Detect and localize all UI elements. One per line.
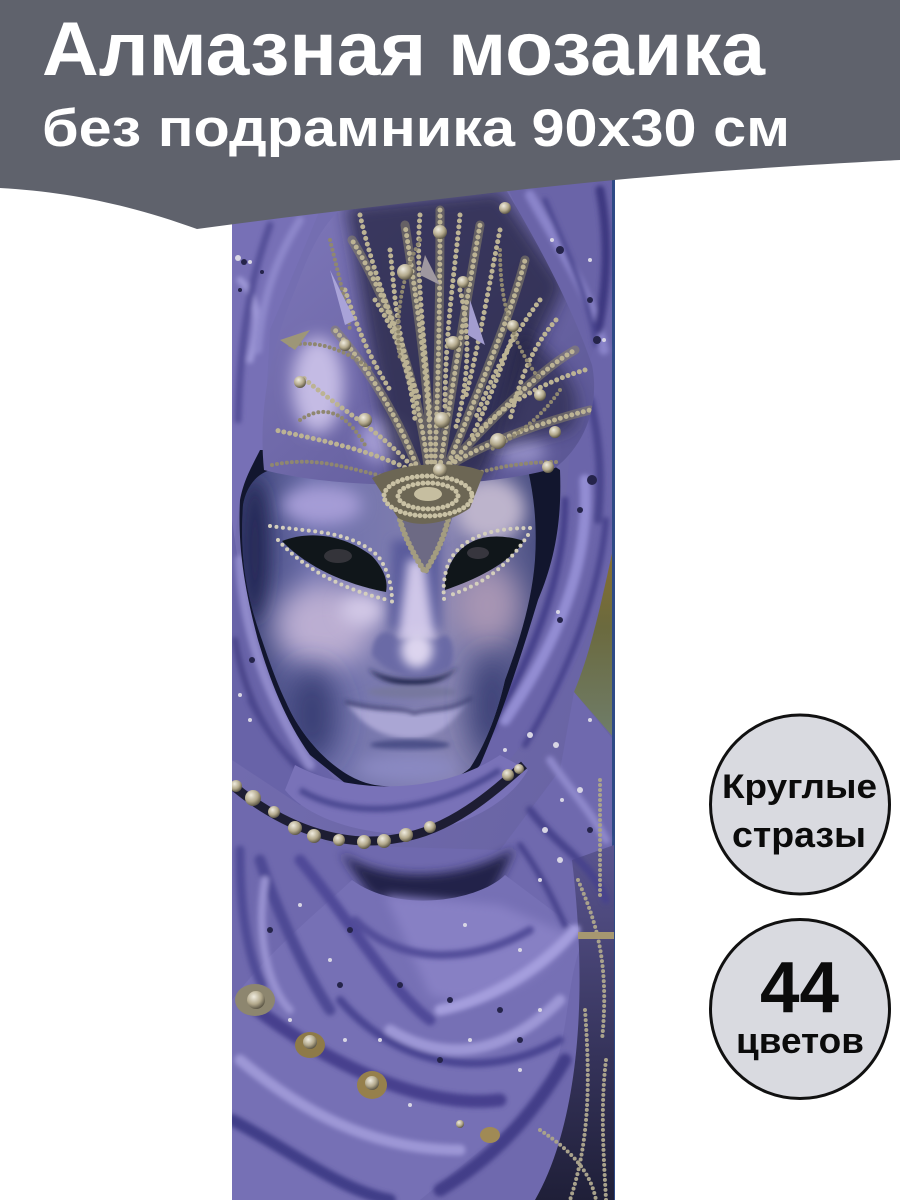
gold brooches on scarf <box>235 984 500 1143</box>
central brooch <box>372 464 484 524</box>
shadow of hood around the face <box>240 450 560 795</box>
large pearls <box>397 264 413 280</box>
neck drape <box>285 755 528 834</box>
bead outlines around the eyes <box>270 518 530 605</box>
sequins on fabric <box>235 238 606 1107</box>
headdress <box>262 188 594 524</box>
mask face <box>235 465 545 795</box>
header banner <box>0 0 900 229</box>
subtitle: без подрамника 90х30 см <box>42 99 790 158</box>
badge: 44 colors: 44 <box>760 948 839 1028</box>
title: Алмазная мозаика <box>42 7 766 92</box>
mask eyes <box>282 535 524 592</box>
pearl necklace <box>230 764 524 849</box>
badge: 44 colors: цветов <box>736 1020 864 1061</box>
badge: round rhinestones <box>710 715 890 894</box>
badge: 44 colors <box>710 920 890 1098</box>
badge: round rhinestones: стразы <box>732 814 866 855</box>
lower scarf <box>232 692 614 1200</box>
bead plumes <box>275 210 590 480</box>
badge: round rhinestones: Круглые <box>722 768 877 806</box>
background behind figure <box>574 554 612 736</box>
hood: upper scarf folds <box>232 170 616 1200</box>
bead plumes underglow <box>335 210 590 480</box>
picture: purple masked figure <box>230 170 616 1200</box>
